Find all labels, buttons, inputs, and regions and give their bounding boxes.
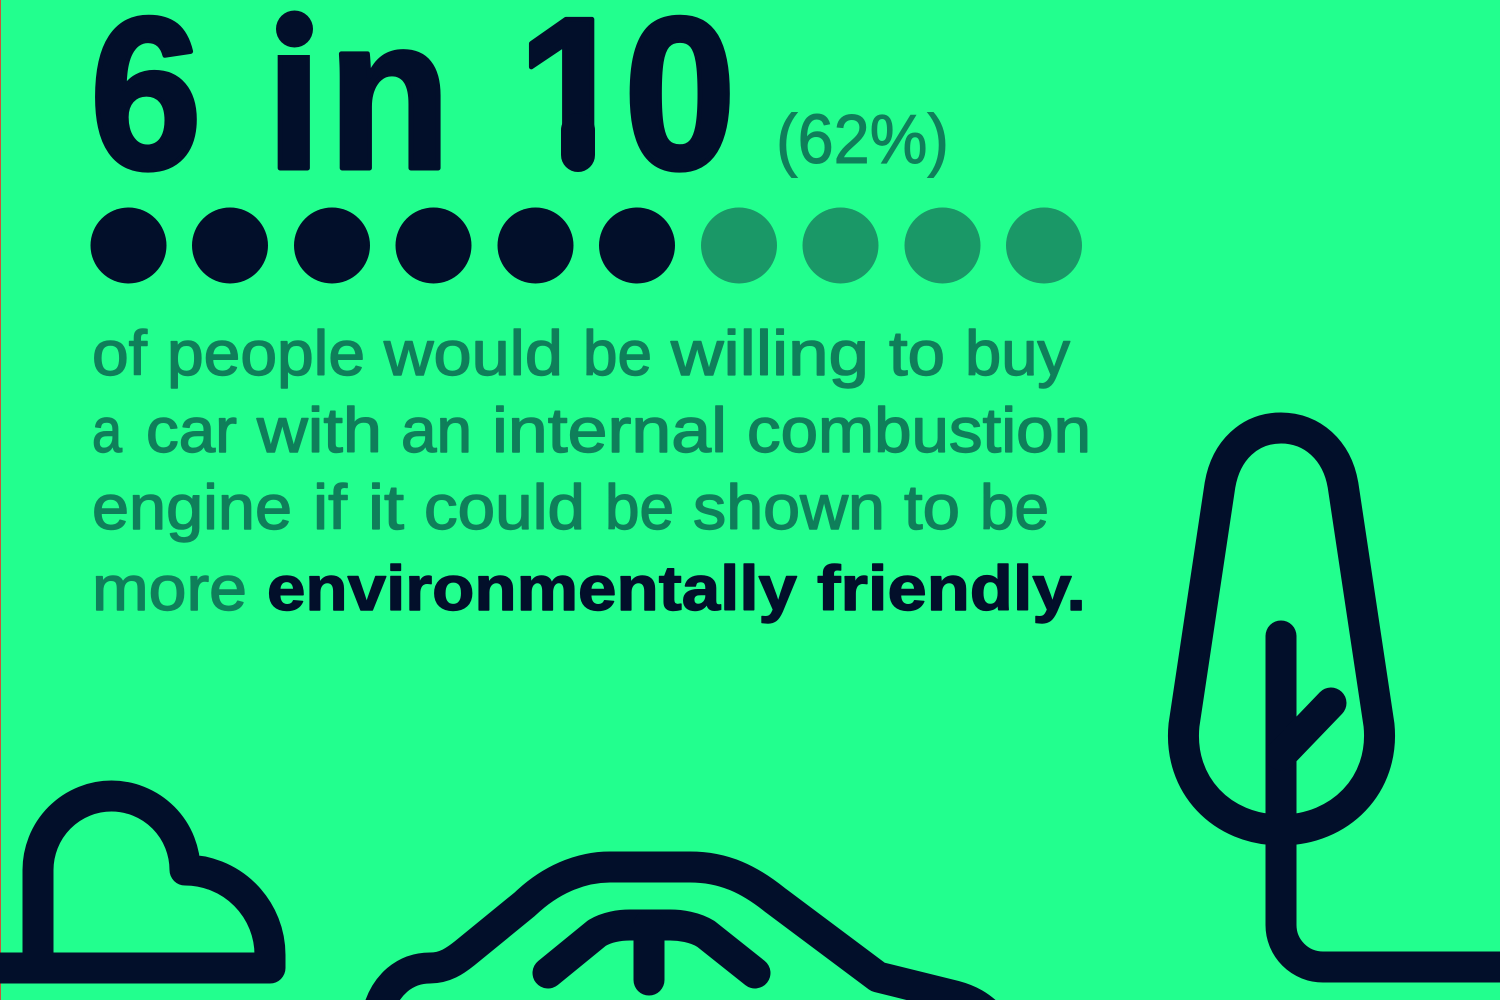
body text: buy	[965, 319, 1071, 389]
body text: with	[256, 396, 382, 466]
body text: willing	[670, 319, 869, 389]
dot pictogram: 6 of 10 filled	[90, 208, 1082, 284]
body text: internal	[492, 396, 727, 466]
icon: car	[378, 867, 990, 1000]
body text: more	[92, 554, 247, 624]
body text: it	[368, 473, 405, 543]
percentage note: (62%)	[776, 100, 949, 178]
body text: friendly.	[817, 554, 1086, 624]
body text: engine	[92, 473, 292, 543]
body text: to	[889, 319, 945, 389]
body text: shown	[693, 473, 885, 543]
body text: an	[401, 396, 472, 466]
body text: be	[583, 319, 652, 389]
body text: could	[424, 473, 585, 543]
body text	[92, 319, 1091, 624]
icon: bush	[0, 796, 270, 968]
body text: if	[313, 473, 348, 543]
body text: be	[980, 473, 1049, 543]
body text: would	[383, 319, 563, 389]
body text: of	[92, 319, 148, 389]
body text: people	[167, 319, 365, 389]
icon: tree	[1183, 428, 1500, 967]
body text: environmentally	[267, 554, 797, 624]
body text: combustion	[747, 396, 1091, 466]
body text: be	[605, 473, 674, 543]
body text: car	[146, 396, 237, 466]
body text: to	[904, 473, 960, 543]
body text: a	[92, 396, 123, 466]
